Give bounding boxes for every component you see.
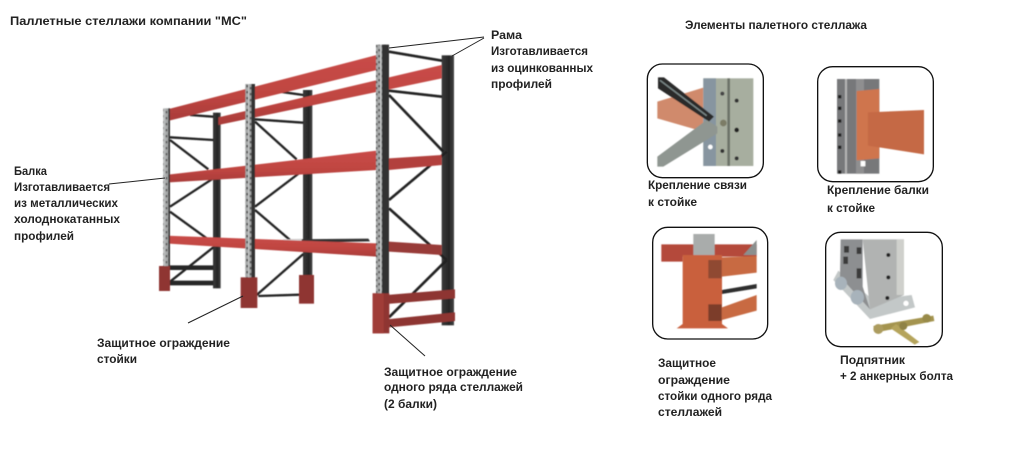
caption: base plate and anchor bolts	[840, 353, 953, 383]
label: frame: Рама	[491, 28, 522, 42]
two-beam row guard	[373, 289, 455, 333]
label: row guard: Защитное ограждение	[384, 365, 517, 379]
label: row guard	[384, 365, 523, 411]
panel: row guard detail	[653, 227, 768, 339]
caption: beam to upright: к стойке	[827, 201, 875, 215]
panel: base plate and anchor bolts	[826, 232, 942, 347]
label: post guard: стойки	[97, 352, 137, 366]
frame bracing	[170, 52, 447, 317]
lower left guard	[170, 265, 213, 285]
front beams	[165, 55, 377, 257]
pallet rack illustration	[159, 45, 455, 333]
caption: base plate and anchor bolts: + 2 анкерных болта	[840, 369, 953, 383]
label: frame: профилей	[491, 77, 552, 91]
leader lines	[109, 37, 484, 356]
caption: base plate and anchor bolts: Подпятник	[840, 353, 906, 367]
panel: beam to upright	[818, 67, 933, 182]
caption: row guard detail: ограждение	[658, 373, 730, 387]
title: Паллетные стеллажи компании "МС"	[10, 14, 247, 28]
caption: row guard detail: стойки одного ряда	[658, 389, 772, 403]
caption: beam to upright: Крепление балки	[827, 183, 929, 197]
caption: row guard detail: стеллажей	[658, 405, 722, 419]
caption: brace to upright: Крепление связи	[648, 178, 747, 192]
label: beam	[14, 164, 120, 243]
back uprights	[213, 55, 454, 325]
label: post guard	[97, 336, 230, 366]
label: beam: Изготавливается	[14, 180, 110, 194]
caption: row guard detail	[658, 356, 772, 419]
post guards	[159, 266, 389, 333]
label: beam: профилей	[14, 229, 74, 243]
label: beam: Балка	[14, 164, 47, 178]
label: beam: холоднокатанных	[14, 212, 120, 226]
label: frame: Изготавливается	[491, 44, 588, 58]
label: row guard: одного ряда стеллажей	[384, 380, 523, 394]
beam shelf panel	[283, 239, 370, 243]
label: beam: из металлических	[14, 196, 118, 210]
label: post guard: Защитное ограждение	[97, 336, 230, 350]
label: frame: из оцинкованных	[491, 61, 593, 75]
back beams	[218, 65, 442, 255]
caption: row guard detail: Защитное	[658, 356, 716, 370]
caption: beam to upright	[827, 183, 929, 215]
near uprights	[163, 108, 170, 268]
label: row guard: (2 балки)	[384, 397, 437, 411]
label: frame	[491, 28, 593, 91]
heading: rack elements: Элементы палетного стеллажа	[685, 18, 867, 32]
panel: brace to upright	[647, 64, 763, 178]
caption: brace to upright	[648, 178, 747, 209]
caption: brace to upright: к стойке	[648, 195, 697, 209]
